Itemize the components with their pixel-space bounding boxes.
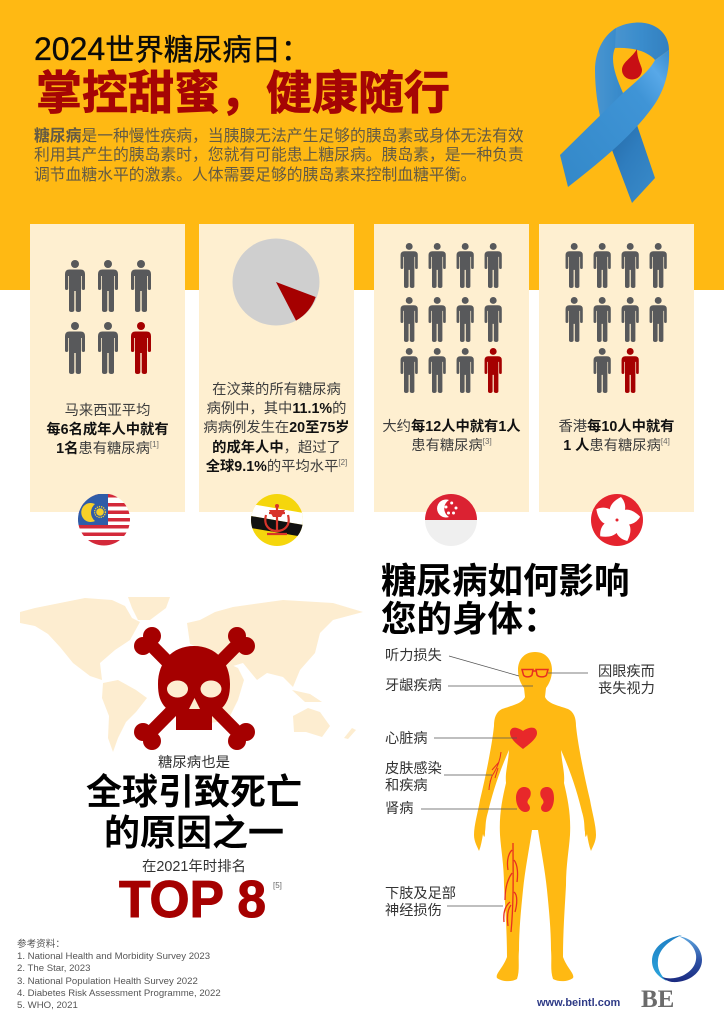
leg veins bbox=[504, 843, 518, 932]
kidneys bbox=[516, 787, 531, 812]
Singapore text bbox=[382, 418, 521, 454]
Brunei text bbox=[203, 382, 350, 475]
Malaysia text: 每6名成年人中就有 bbox=[46, 422, 169, 438]
subtitle: 掌控甜蜜，健康随行 bbox=[36, 67, 450, 119]
panel: Singapore bbox=[374, 224, 529, 512]
label: hearing loss: 听力损失 bbox=[385, 648, 442, 664]
Malaysia text: 马来西亚平均 bbox=[65, 403, 150, 419]
glasses bbox=[522, 670, 548, 677]
text: diabetes is also: 糖尿病也是 bbox=[158, 755, 230, 771]
title: 2024世界糖尿病日： bbox=[34, 31, 310, 67]
Hong Kong text: 1 人患有糖尿病[4] bbox=[563, 437, 670, 454]
Brunei text: 在汶莱的所有糖尿病 bbox=[212, 382, 341, 398]
label: nerve damage bbox=[385, 886, 456, 918]
icon: Singapore flag bbox=[425, 494, 477, 546]
header background band bbox=[0, 0, 724, 290]
text: ranked in 2021: 在2021年时排名 bbox=[142, 859, 246, 875]
icon: twelve people, one red bbox=[400, 243, 502, 393]
Brunei text: 的成年人中，超过了 bbox=[212, 440, 341, 456]
icon: Malaysia flag bbox=[78, 494, 130, 546]
icon: six people, one red bbox=[65, 260, 151, 374]
body silhouette bbox=[474, 652, 596, 981]
label: heart disease: 心脏病 bbox=[385, 731, 428, 747]
logo ring bbox=[652, 935, 702, 982]
heading: leading cause of death bbox=[86, 771, 302, 852]
icon: Hong Kong flag bbox=[591, 494, 643, 546]
label: vision loss: 因眼疾而 bbox=[598, 664, 655, 680]
Brunei text: 病病例发生在20至75岁 bbox=[203, 420, 350, 436]
website: www.beintl.com bbox=[537, 997, 620, 1009]
heading: leading cause of death: 全球引致死亡 bbox=[86, 771, 302, 812]
heading: how diabetes affects your body: 您的身体： bbox=[381, 599, 559, 639]
heading: how diabetes affects your body: 糖尿病如何影响 bbox=[381, 561, 630, 601]
pie chart 11.1% bbox=[232, 238, 320, 326]
world map background bbox=[20, 597, 362, 752]
Malaysia text bbox=[46, 402, 169, 457]
label: skin infection: 皮肤感染 bbox=[385, 761, 442, 777]
label: gum disease: 牙龈疾病 bbox=[385, 678, 442, 694]
Singapore text: 大约每12人中就有1人 bbox=[382, 419, 521, 435]
icon: blue awareness ribbon with blood drop bbox=[560, 22, 670, 203]
label: vision loss: 丧失视力 bbox=[598, 680, 655, 696]
label: nerve damage: 神经损伤 bbox=[385, 902, 442, 918]
label: vision loss bbox=[598, 664, 655, 696]
references: 5. WHO, 2021 bbox=[17, 1000, 78, 1011]
panel: Malaysia bbox=[30, 224, 185, 512]
panel: Brunei bbox=[199, 224, 354, 512]
label: kidney disease: 肾病 bbox=[385, 801, 413, 817]
references: 参考资料： bbox=[17, 939, 65, 950]
body diagram bbox=[474, 652, 596, 982]
Malaysia text: 1名患有糖尿病[1] bbox=[56, 440, 159, 457]
panel: Hong Kong bbox=[539, 224, 694, 512]
label: nerve damage: 下肢及足部 bbox=[385, 886, 456, 902]
references: 2. The Star, 2023 bbox=[17, 963, 90, 974]
icon: ten people, one red bbox=[566, 243, 667, 393]
intro paragraph: 糖尿病是一种慢性疾病，当胰腺无法产生足够的胰岛素或身体无法有效 bbox=[34, 128, 524, 144]
label: skin infection bbox=[385, 760, 442, 794]
Brunei text: 病例中，其中11.1%的 bbox=[207, 401, 346, 417]
references bbox=[17, 938, 221, 1011]
callout lines bbox=[421, 656, 588, 906]
references: 4. Diabetes Risk Assessment Programme, 2022 bbox=[17, 988, 221, 999]
Hong Kong text: 香港每10人中就有 bbox=[558, 419, 674, 435]
label: skin infection: 和疾病 bbox=[385, 778, 428, 794]
reference mark 5: [5] bbox=[273, 881, 282, 890]
Brunei text: 全球9.1%的平均水平[2] bbox=[206, 458, 347, 475]
heading: leading cause of death: 的原因之一 bbox=[104, 812, 284, 852]
Hong Kong text bbox=[558, 418, 674, 454]
logo letters BE: BE bbox=[641, 986, 674, 1013]
intro paragraph: 利用其产生的胰岛素时，您就有可能患上糖尿病。胰岛素，是一种负责 bbox=[34, 147, 524, 164]
references: 3. National Population Health Survey 2022 bbox=[17, 976, 198, 987]
icon: Brunei flag bbox=[251, 494, 303, 546]
intro paragraph: 调节血糖水平的激素。人体需要足够的胰岛素来控制血糖平衡。 bbox=[34, 167, 476, 184]
heading: how diabetes affects your body bbox=[381, 561, 630, 639]
icon: skull and crossbones bbox=[134, 627, 255, 750]
arm veins bbox=[489, 752, 501, 790]
heart bbox=[510, 728, 537, 749]
Singapore text: 患有糖尿病[3] bbox=[411, 437, 492, 454]
references: 1. National Health and Morbidity Survey 2023 bbox=[17, 951, 210, 962]
intro paragraph bbox=[34, 127, 524, 184]
TOP 8: TOP 8 bbox=[119, 870, 266, 928]
